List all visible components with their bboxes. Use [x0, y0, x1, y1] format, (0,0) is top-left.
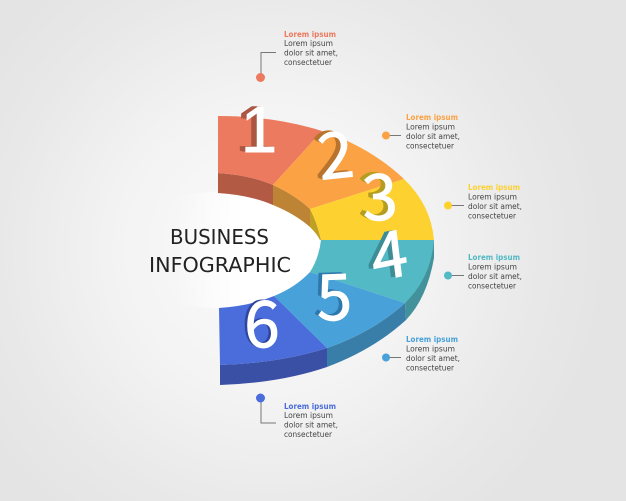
numeral 1: 1 — [241, 93, 277, 166]
callout 4: Lorem ipsum — [468, 262, 517, 272]
numeral 2: 2 — [309, 103, 354, 198]
callout 2: consectetuer — [406, 140, 455, 150]
callout 5 — [382, 334, 460, 372]
segment 4 — [310, 240, 434, 303]
title: BUSINESS — [170, 225, 269, 249]
numeral 4: 4 — [365, 200, 412, 300]
side wall: segment 5 — [327, 303, 406, 367]
donut chart — [218, 116, 434, 385]
callout 2 — [382, 112, 460, 150]
callout 3: dolor sit amet, — [468, 201, 522, 211]
numeral 5: 5 — [315, 246, 353, 340]
callout 4 — [444, 252, 522, 290]
callout 1: dolor sit amet, — [284, 48, 338, 58]
callout 6: Lorem ipsum — [284, 410, 333, 420]
numeral 2: 2 — [313, 104, 358, 199]
numeral 1: 1 — [237, 92, 273, 165]
callout 2: Lorem ipsum — [406, 112, 458, 122]
callout 1: Lorem ipsum — [284, 29, 336, 39]
inner wall: segment 3 — [310, 209, 321, 240]
callout 5: Lorem ipsum — [406, 344, 455, 354]
callout 1: Lorem ipsum — [284, 38, 333, 48]
numeral 4: 4 — [364, 200, 410, 300]
callout 6: dolor sit amet, — [284, 420, 338, 430]
segment 6 — [219, 296, 327, 365]
title: INFOGRAPHIC — [149, 253, 291, 277]
callout 5: consectetuer — [406, 362, 455, 372]
callout 6: Lorem ipsum — [284, 401, 336, 411]
segment 2 — [273, 131, 404, 209]
callout 2: dolor sit amet, — [406, 131, 460, 141]
numeral 3: 3 — [354, 144, 395, 238]
callout 4: consectetuer — [468, 280, 517, 290]
numeral 6: 6 — [243, 274, 279, 366]
numeral 4: 4 — [360, 200, 407, 300]
numeral 3: 3 — [356, 145, 396, 239]
numeral 5: 5 — [312, 245, 351, 338]
segment 5 — [274, 272, 405, 348]
callout 5: dolor sit amet, — [406, 353, 460, 363]
callout 6 — [256, 394, 338, 439]
inner wall: segment 2 — [273, 185, 310, 227]
numeral 1: 1 — [239, 93, 275, 166]
numeral 3: 3 — [359, 146, 400, 240]
side wall: segment 4 — [405, 240, 434, 320]
callout 3 — [444, 182, 522, 220]
numeral 4: 4 — [362, 200, 408, 300]
numeral 6: 6 — [244, 274, 280, 366]
inner wall: segment 1 — [218, 173, 273, 205]
numeral 2: 2 — [311, 103, 356, 198]
numeral 1: 1 — [235, 92, 271, 165]
callout 1: consectetuer — [284, 57, 333, 67]
numeral 3: 3 — [358, 146, 398, 239]
callout 4: Lorem ipsum — [468, 252, 520, 262]
segment 1 — [218, 116, 322, 185]
numeral 2: 2 — [308, 102, 352, 197]
numeral 6: 6 — [242, 273, 278, 365]
side wall: segment 6 — [220, 348, 327, 385]
numeral 5: 5 — [311, 245, 349, 338]
callout 5: Lorem ipsum — [406, 334, 458, 344]
callout 6: consectetuer — [284, 429, 333, 439]
central hole highlight — [115, 192, 321, 308]
callout 3: consectetuer — [468, 210, 517, 220]
callout 2: Lorem ipsum — [406, 122, 455, 132]
numeral 5: 5 — [313, 246, 352, 339]
numeral 6: 6 — [241, 273, 277, 365]
callout 1 — [256, 29, 338, 82]
title — [149, 225, 291, 277]
callout 4: dolor sit amet, — [468, 271, 522, 281]
callout 3: Lorem ipsum — [468, 182, 520, 192]
segment 3 — [310, 179, 434, 240]
callout 3: Lorem ipsum — [468, 192, 517, 202]
